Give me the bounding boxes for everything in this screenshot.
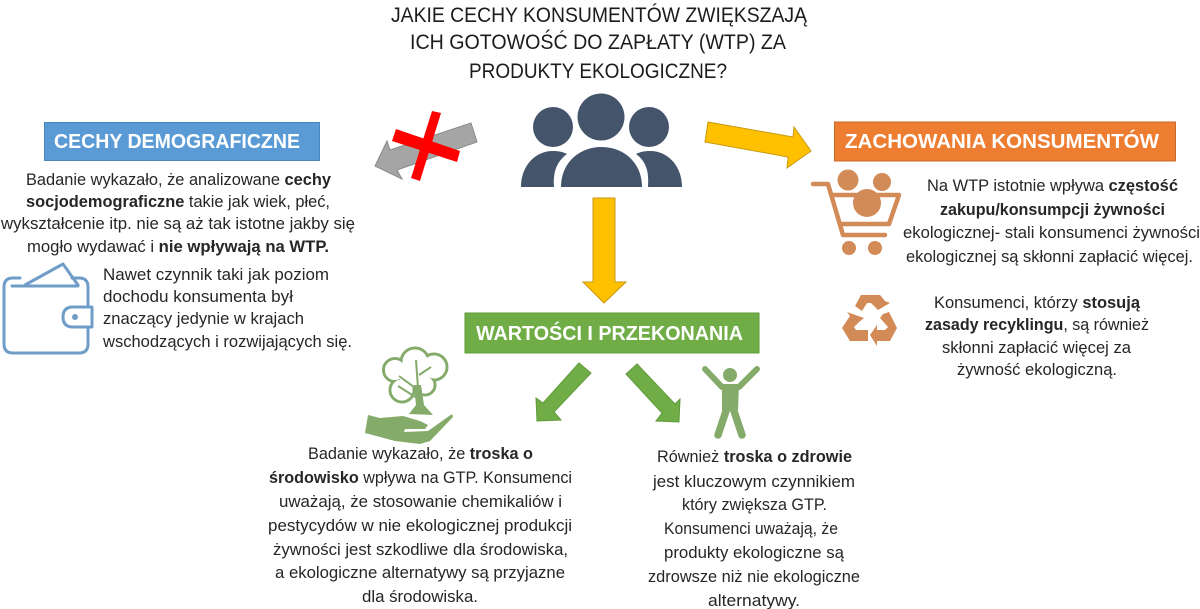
text block: environment: uważają, że stosowanie chemikaliów i xyxy=(279,493,562,511)
text block: environment: a ekologiczne alternatywy są przyjazne xyxy=(275,564,565,582)
text block: recycling: zasady recyklingu, są również xyxy=(925,316,1149,334)
text block: health: jest kluczowym czynnikiem xyxy=(652,473,855,491)
text block: recycling: żywność ekologiczną. xyxy=(957,361,1117,379)
text block: environment: środowisko wpływa na GTP. Konsumenci xyxy=(269,469,572,487)
title: JAKIE CECHY KONSUMENTÓW ZWIĘKSZAJĄ xyxy=(391,2,808,27)
text block: demographics: wykształcenie itp. nie są aż tak istotne jakby się xyxy=(0,215,355,233)
text block: income: znaczący jedynie w krajach xyxy=(103,310,304,328)
text block: purchase frequency: ekologicznej są skłonni zapłacić więcej. xyxy=(906,248,1193,266)
icon: recycling xyxy=(842,295,897,346)
arrow: grey arrow to demographics, crossed out xyxy=(375,111,477,181)
text block: environment: żywności jest szkodliwe dla środowiska, xyxy=(273,541,568,559)
title: ICH GOTOWOŚĆ DO ZAPŁATY (WTP) ZA xyxy=(410,29,787,54)
text block: purchase frequency: zakupu/konsumpcji żywności xyxy=(940,201,1165,219)
icon: group of people xyxy=(521,94,682,187)
arrow: green arrow to health xyxy=(626,364,680,422)
text block: health: Konsumenci uważają, że xyxy=(664,520,838,538)
icon: shopping cart xyxy=(813,170,899,255)
heading: consumer behaviour: ZACHOWANIA KONSUMENTÓW xyxy=(845,129,1160,153)
text block: recycling: skłonni zapłacić więcej za xyxy=(942,339,1132,357)
arrow: yellow arrow to consumer behaviour xyxy=(705,122,811,168)
text block: purchase frequency xyxy=(903,177,1200,266)
text block: demographics: mogło wydawać i nie wpływają na WTP. xyxy=(27,238,329,256)
arrow: yellow arrow down to values xyxy=(583,198,626,303)
icon: wallet xyxy=(4,264,92,353)
icon: tree in hand xyxy=(365,348,453,444)
text block: health: który zwiększa GTP. xyxy=(682,496,827,514)
text block: environment: pestycydów w nie ekologicznej produkcji xyxy=(268,517,572,535)
text block: health xyxy=(648,448,860,609)
text block: demographics: Badanie wykazało, że analizowane cechy xyxy=(26,171,332,189)
icon: person with raised arms xyxy=(705,368,757,435)
text block: recycling xyxy=(925,294,1149,379)
text block: purchase frequency: ekologicznej- stali konsumenci żywności xyxy=(903,224,1200,242)
heading: demographics: CECHY DEMOGRAFICZNE xyxy=(54,130,300,153)
text block: income: wschodzących i rozwijających się. xyxy=(102,333,352,351)
text block: environment xyxy=(268,445,572,606)
title xyxy=(391,2,808,83)
text block: income: Nawet czynnik taki jak poziom xyxy=(103,266,329,284)
heading: values and beliefs xyxy=(465,313,759,353)
arrow: green arrow to environment xyxy=(536,363,591,421)
title: PRODUKTY EKOLOGICZNE? xyxy=(469,59,727,83)
text block: health: produkty ekologiczne są xyxy=(664,544,845,562)
text block: demographics: socjodemograficzne takie jak wiek, płeć, xyxy=(26,193,330,211)
heading: values and beliefs: WARTOŚCI I PRZEKONANIA xyxy=(476,321,743,345)
text block: health: zdrowsze niż nie ekologiczne xyxy=(648,568,860,586)
heading: demographics xyxy=(44,122,320,160)
text block: income: dochodu konsumenta był xyxy=(103,288,293,306)
text block: health: Również troska o zdrowie xyxy=(657,448,852,466)
text block: environment: dla środowiska. xyxy=(362,588,478,606)
heading: consumer behaviour xyxy=(834,122,1176,161)
text block: demographics xyxy=(0,171,355,256)
text block: environment: Badanie wykazało, że troska o xyxy=(308,445,533,463)
text block: income xyxy=(102,266,352,351)
text block: purchase frequency: Na WTP istotnie wpływa częstość xyxy=(927,177,1178,195)
text block: recycling: Konsumenci, którzy stosują xyxy=(934,294,1141,312)
